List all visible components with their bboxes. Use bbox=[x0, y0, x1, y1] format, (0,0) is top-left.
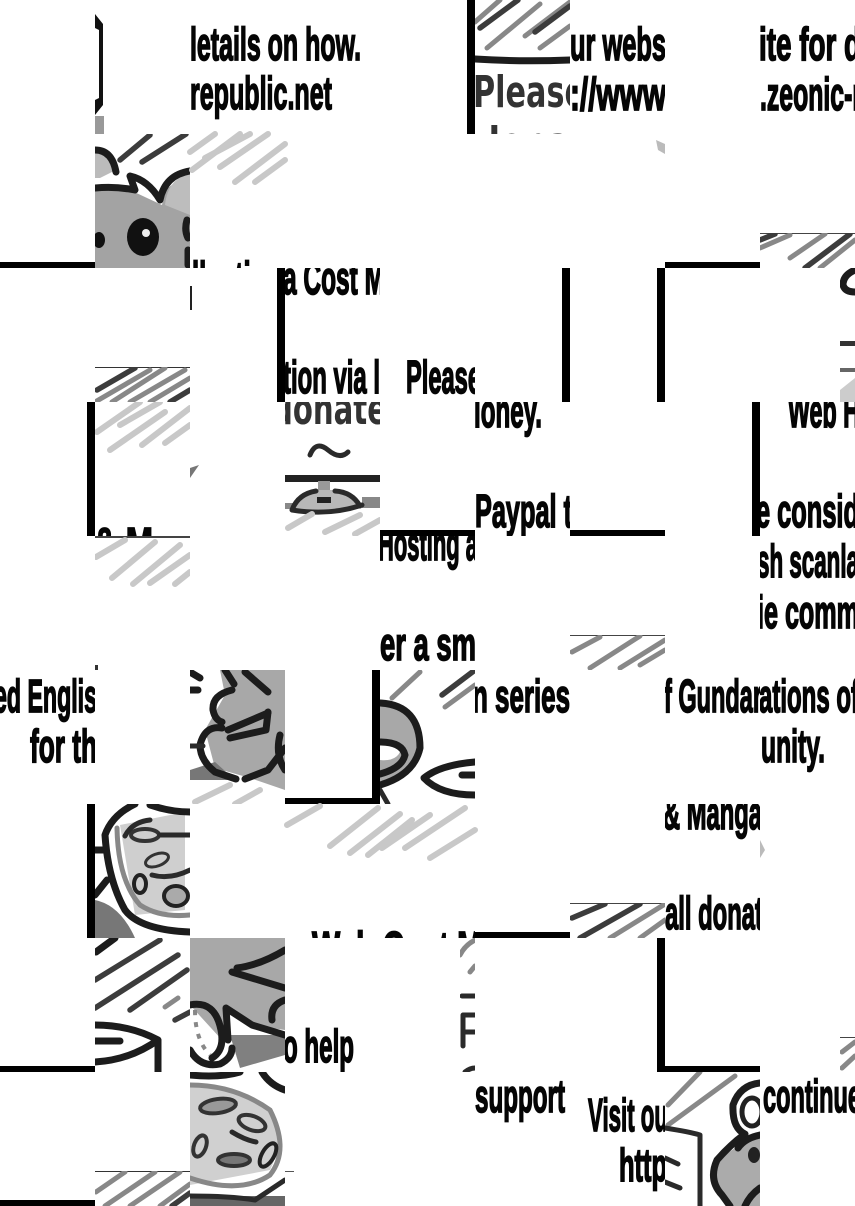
illustration: grey bear body bbox=[190, 938, 285, 1068]
hatching: light top bbox=[190, 134, 285, 182]
text: republic.net: republic.net bbox=[190, 67, 332, 119]
illustration fragment: handwritten edge bbox=[460, 940, 475, 1072]
illustration: rodent hand bbox=[190, 670, 285, 804]
rule: thin line bbox=[285, 1171, 294, 1172]
text: support: support bbox=[475, 1070, 565, 1122]
fragments: tiny smudges bbox=[95, 140, 765, 858]
hatching: light band under bar bbox=[95, 402, 190, 453]
hatching: dark band bbox=[95, 367, 190, 402]
illustration: rodent face bbox=[95, 134, 190, 268]
hatching: fragment above bar bbox=[570, 903, 665, 938]
illustration: ear, hatching and bowl bbox=[380, 670, 475, 804]
text: letails on how: letails on how. bbox=[190, 18, 361, 70]
illustration: plate of food lower bbox=[190, 1072, 285, 1206]
illustration fragment: jagged edge bbox=[95, 14, 104, 134]
illustration: bear head and sign bbox=[665, 1072, 762, 1206]
illustration: hatching and bowl bbox=[95, 938, 190, 1072]
hatching: top right fragment bbox=[760, 233, 855, 268]
hatching: lower left bbox=[95, 1171, 190, 1206]
illustration fragment: right edge bbox=[840, 268, 855, 402]
illustration: Donate, tilde and stand bbox=[272, 384, 387, 536]
illustration: plate of food top bbox=[95, 804, 190, 938]
hatching: light wide band bbox=[287, 806, 475, 858]
illustration: hatching and handwritten Please bbox=[473, 0, 586, 169]
hatching: light band with dark line bbox=[95, 536, 190, 587]
hatching: small fragment bbox=[570, 635, 665, 670]
hatching: far right fragment bbox=[840, 1037, 855, 1068]
